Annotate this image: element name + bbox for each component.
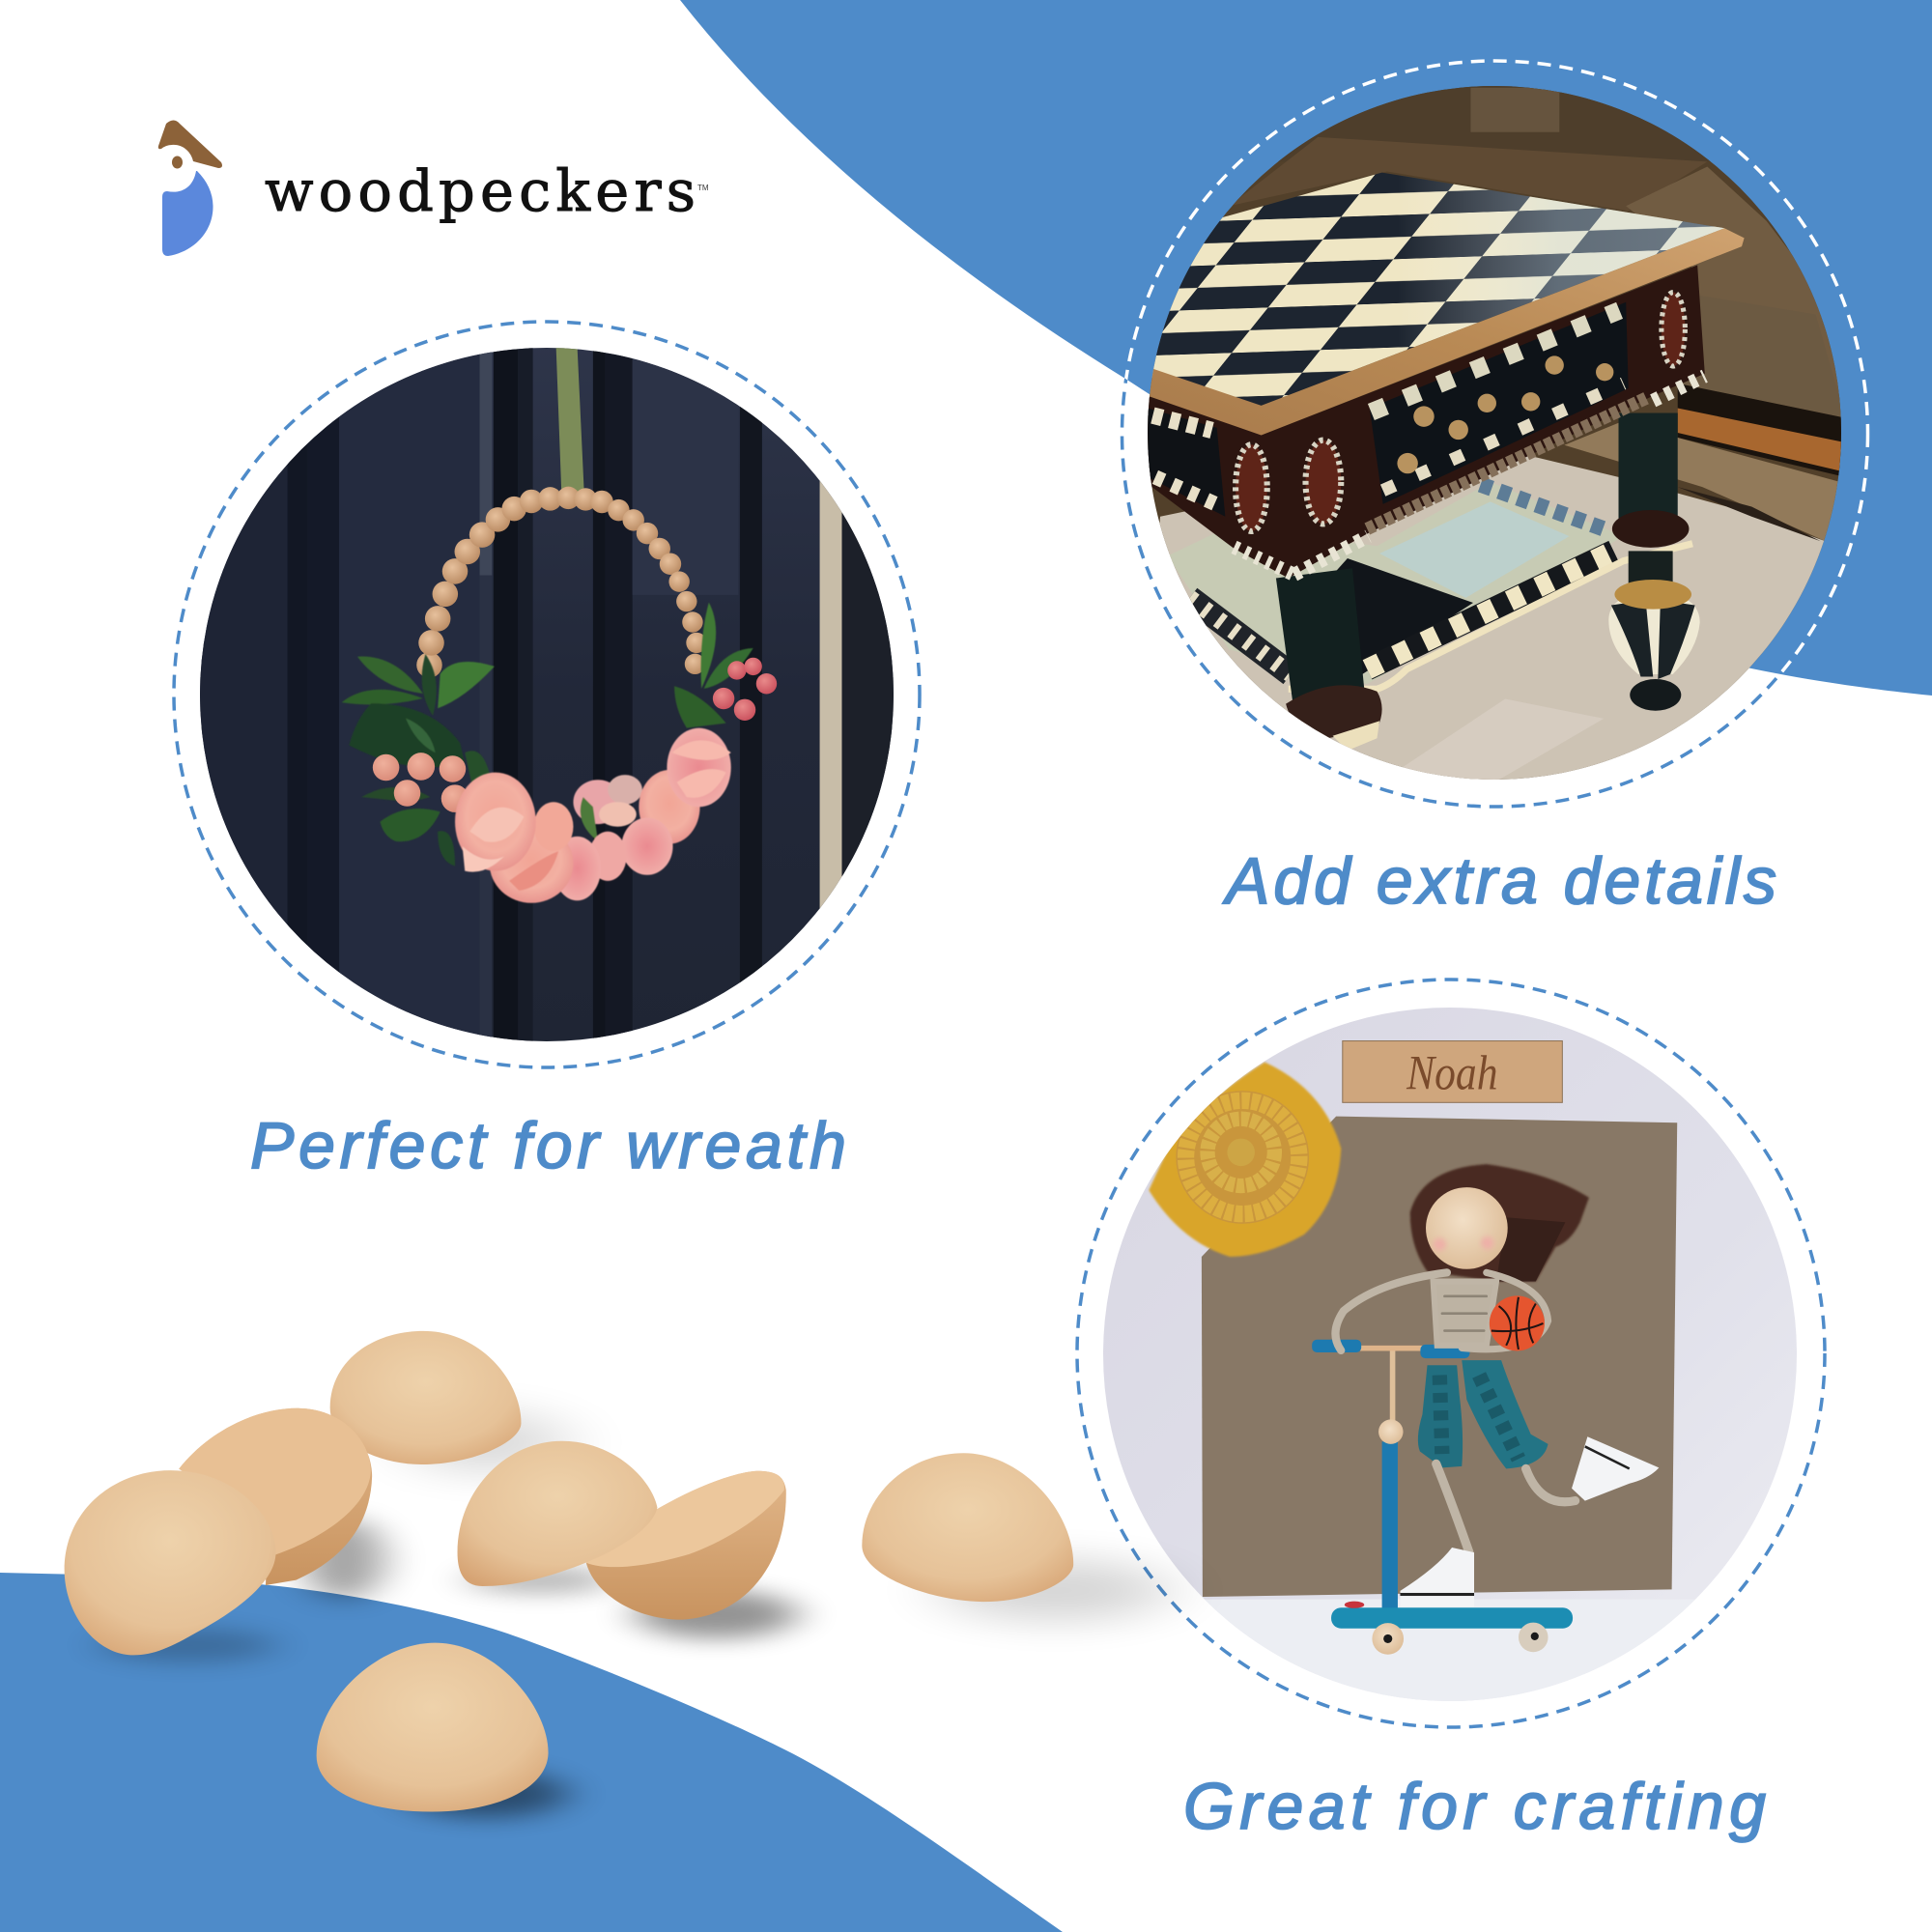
table apron [1146, 265, 1705, 578]
egg shadows [99, 1411, 1171, 1818]
photo: wreath on dark door [194, 339, 903, 1048]
photo: painted checker table [1130, 78, 1850, 787]
panel: wreath photo [174, 322, 920, 1067]
caption: great for crafting: Great for crafting [1183, 1770, 1766, 1843]
egg: flat face behind [179, 1408, 372, 1585]
brass studs [1397, 355, 1613, 473]
egg: bottom [317, 1643, 549, 1812]
photo: macrame scooter figure [1093, 996, 1812, 1718]
yellow sun [1149, 1062, 1341, 1257]
lower shelf [1168, 482, 1692, 689]
caption: add extra details: Add extra details [1222, 844, 1776, 918]
checkered table top [1130, 173, 1724, 406]
dashed ring: table [1122, 61, 1868, 807]
caption: perfect for wreath: Perfect for wreath [250, 1109, 846, 1182]
peony flowers [455, 728, 731, 903]
product: wooden half eggs [65, 1331, 1171, 1818]
pants [1418, 1360, 1548, 1468]
canvas backing [1202, 1117, 1677, 1597]
wooden beads [416, 487, 707, 678]
gold table edge [1141, 228, 1745, 436]
name text: Noah [1406, 1047, 1498, 1101]
red berries [713, 658, 777, 721]
body and limbs [1335, 1272, 1576, 1552]
wooden head [1426, 1187, 1508, 1269]
hair [1410, 1164, 1589, 1282]
ribbon [556, 346, 584, 493]
logo: woodpeckers [158, 120, 709, 256]
dashed ring: craft [1077, 980, 1825, 1727]
table legs [1276, 413, 1700, 751]
dashed ring: wreath [174, 322, 920, 1067]
rug [1564, 423, 1840, 541]
name plate [1343, 1041, 1562, 1102]
egg: left front [65, 1470, 276, 1655]
trademark: TM [697, 184, 709, 192]
bottom left blue wave [0, 1573, 1063, 1932]
egg: top [330, 1331, 521, 1464]
basketball [1490, 1295, 1545, 1350]
icon: woodpecker bird [158, 120, 222, 256]
sneakers [1400, 1436, 1659, 1606]
top right blue wave [680, 0, 1932, 696]
egg: tilted [458, 1441, 657, 1586]
leaves [342, 603, 753, 867]
logo wordmark: woodpeckers [265, 157, 696, 224]
panel: macrame craft photo [1077, 980, 1825, 1727]
panel: painted table photo [1122, 61, 1868, 807]
pale berries [373, 753, 469, 812]
egg: flat face cut [586, 1471, 786, 1620]
drop cloth [1159, 456, 1824, 780]
egg: right [862, 1453, 1073, 1602]
medallions [1236, 444, 1267, 531]
scooter [1312, 1340, 1573, 1655]
